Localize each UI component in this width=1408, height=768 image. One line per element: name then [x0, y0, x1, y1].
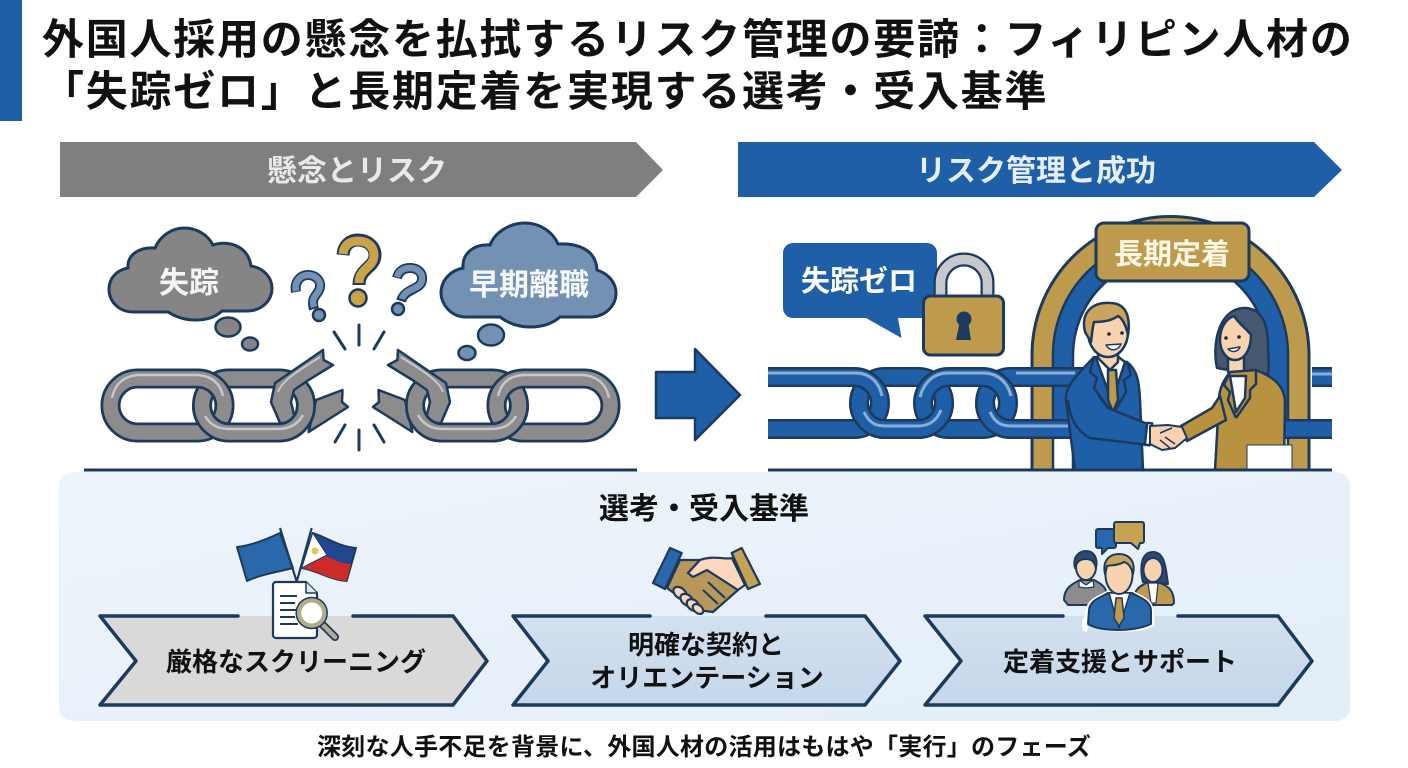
arch: long-term retention — [1032, 216, 1309, 470]
left ground line — [84, 468, 637, 472]
broken chain: right half — [373, 350, 610, 432]
illustration: businessman — [1066, 303, 1152, 470]
speech bubble: zero disappearance: 失踪ゼロ — [801, 265, 917, 298]
icon: padlock — [924, 260, 1004, 355]
cloud: disappearance — [109, 228, 272, 350]
banner: risk management and success: リスク管理と成功 — [916, 155, 1156, 188]
strong blue chain — [768, 373, 1332, 429]
title: 外国人採用の懸念を払拭するリスク管理の要諦：フィリピン人材の — [42, 16, 1354, 63]
illustration: businesswoman — [1181, 308, 1292, 470]
step 2: clear contract and orientation: 明確な契約と — [628, 630, 784, 660]
icon: support team with speech bubbles — [1064, 522, 1174, 630]
step 1: strict screening: 厳格なスクリーニング — [166, 647, 426, 677]
icon: handshake — [653, 548, 760, 616]
title: 「失踪ゼロ」と長期定着を実現する選考・受入基準 — [42, 68, 1048, 115]
step 2: clear contract and orientation — [513, 616, 900, 705]
arrow: transition — [656, 349, 740, 440]
banner: risk management and success — [738, 142, 1342, 197]
broken chain: left half — [110, 350, 348, 432]
step 2: clear contract and orientation: オリエンテーション — [590, 663, 824, 693]
step 3: retention support: 定着支援とサポート — [1003, 647, 1237, 677]
panel: selection and acceptance criteria — [59, 472, 1350, 721]
step 3: retention support — [925, 616, 1312, 705]
icon: flags and document inspection — [237, 528, 356, 638]
right ground line — [768, 468, 1332, 472]
break spark lines — [334, 325, 384, 450]
cloud: early turnover: 早期離職 — [469, 269, 589, 302]
cloud: disappearance: 失踪 — [159, 267, 219, 300]
panel heading: 選考・受入基準 — [599, 493, 809, 526]
step 1: strict screening — [100, 616, 487, 705]
icon: question marks — [296, 240, 422, 321]
banner: concerns and risks: 懸念とリスク — [267, 155, 447, 188]
banner: concerns and risks — [60, 142, 663, 197]
title accent bar — [0, 0, 22, 121]
speech bubble: zero disappearance — [783, 243, 937, 338]
cloud: early turnover — [441, 223, 616, 360]
illustration: handshake — [1150, 425, 1187, 450]
arch: long-term retention: 長期定着 — [1114, 238, 1230, 271]
title — [42, 16, 1354, 115]
footer statement: 深刻な人手不足を背景に、外国人材の活用はもはや「実行」のフェーズ — [317, 733, 1091, 761]
